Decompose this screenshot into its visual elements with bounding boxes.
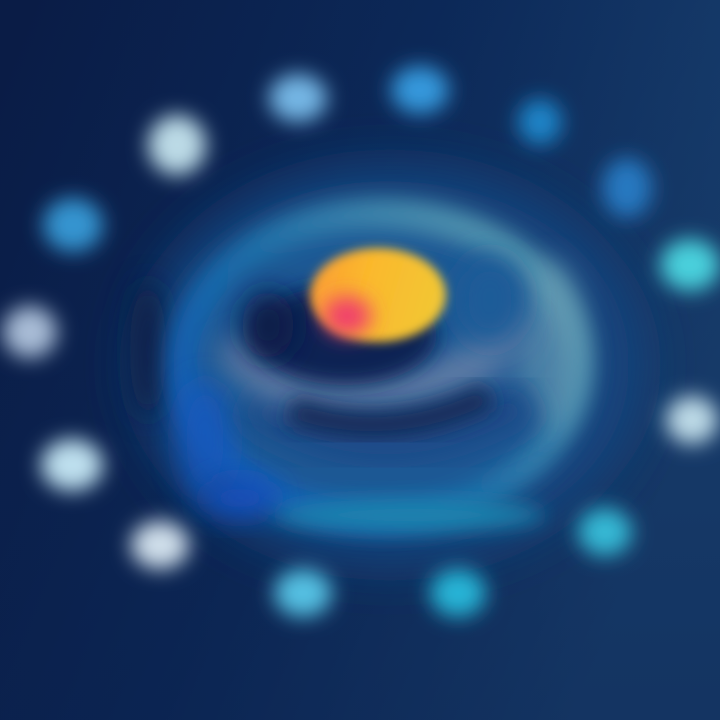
dot (148, 115, 206, 175)
dot (391, 66, 449, 114)
dot (660, 239, 720, 291)
dot (131, 521, 189, 569)
dot (269, 74, 327, 122)
dot (274, 569, 332, 617)
central orange and yellow core (310, 248, 446, 342)
dot (602, 158, 652, 218)
dot (43, 198, 103, 252)
dot (41, 439, 103, 491)
dot (518, 99, 562, 145)
ring of glowing dots (3, 66, 720, 617)
central swirl rings (130, 165, 645, 565)
dot (578, 508, 632, 556)
dot (3, 306, 57, 358)
dot (430, 569, 486, 617)
dot (666, 396, 718, 444)
